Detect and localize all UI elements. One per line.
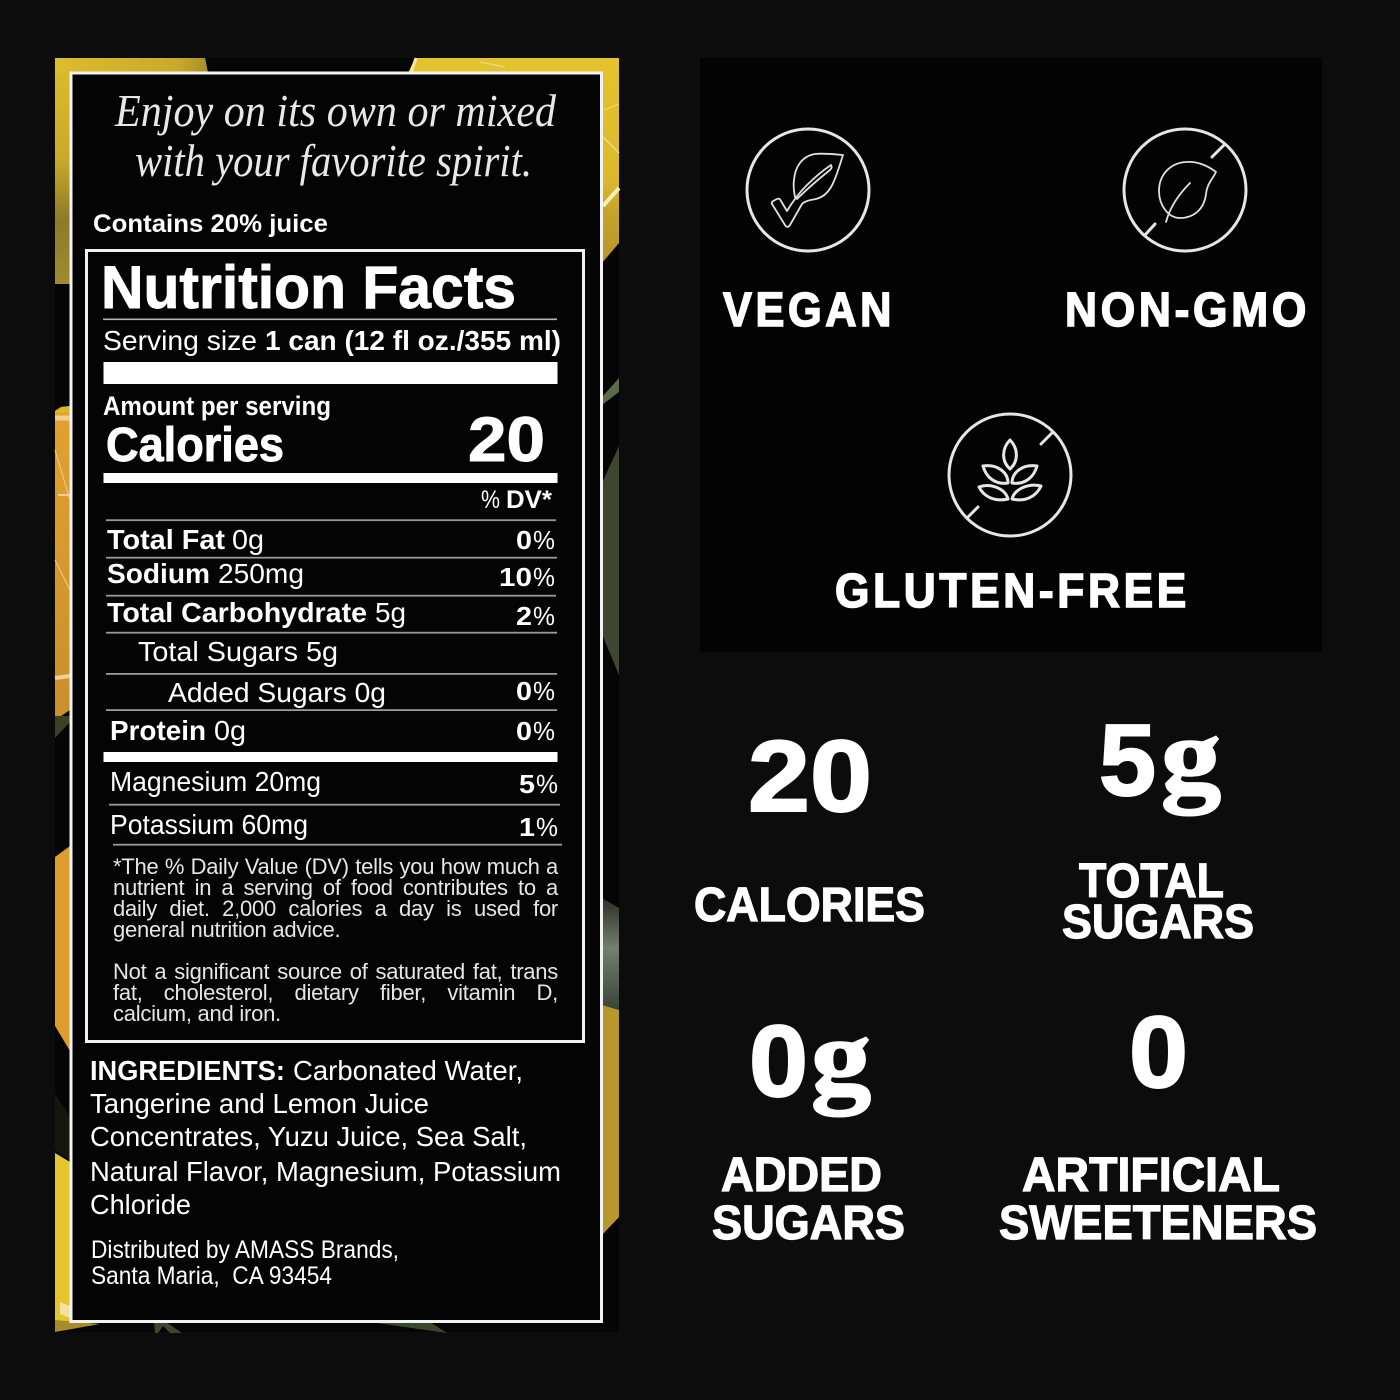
row: total carbohydrate: 2 — [516, 601, 532, 631]
panel: product label background — [55, 58, 619, 1333]
stat: 0g added sugars: ADDED — [721, 1149, 882, 1202]
label: non-gmo: NON-GMO — [1065, 284, 1310, 337]
citrus: right lower lemon — [602, 1005, 619, 1235]
row: added sugars: Added Sugars 0g — [168, 677, 386, 708]
stat: 5g total sugars: TOTAL — [1079, 855, 1224, 908]
row: magnesium: 5 — [519, 769, 535, 799]
panel: dietary badges — [700, 58, 1322, 652]
citrus: lemon pith streaks — [411, 58, 619, 206]
leaf: right gray leaf — [602, 898, 619, 1010]
ingredients: INGREDIENTS: — [90, 1055, 285, 1086]
amount per serving: Amount per serving — [103, 391, 331, 421]
ingredients: Tangerine and Lemon Juice — [90, 1088, 429, 1119]
row: protein: 0 — [516, 716, 532, 746]
panel: black label frame — [71, 73, 602, 1322]
stat: 0g added sugars: 0 — [749, 1006, 808, 1118]
leaf: right thin streak — [602, 378, 619, 405]
daily value header: % — [481, 486, 500, 514]
nutrient table — [104, 519, 562, 846]
row: sodium: 10 — [499, 562, 532, 592]
daily value footnote: general nutrition advice. — [113, 917, 340, 942]
stat: 5g total sugars: g — [1161, 698, 1221, 816]
citrus: top-left lemon — [55, 58, 208, 284]
stat: 0 artificial sweeteners — [999, 997, 1317, 1250]
citrus: left middle orange — [55, 846, 70, 1051]
leaf: lower-left dark — [55, 1094, 70, 1160]
stat: 0g added sugars — [712, 999, 905, 1250]
tagline — [114, 85, 557, 186]
serving size: Serving size — [103, 325, 257, 356]
row: added sugars: % — [533, 676, 555, 706]
ingredients: Carbonated Water, — [293, 1055, 523, 1086]
daily value header — [481, 486, 552, 514]
row: sodium — [107, 558, 555, 592]
stat: 0 artificial sweeteners: SWEETENERS — [999, 1197, 1317, 1250]
distributor — [91, 1236, 399, 1290]
stat: 20 calories: CALORIES — [694, 879, 925, 932]
row: potassium: 1 — [519, 812, 535, 842]
row: total fat — [107, 524, 555, 555]
row: total carbohydrate: % — [533, 601, 555, 631]
tagline: Enjoy on its own or mixed — [114, 85, 557, 136]
citrus: top-left lemon top band — [55, 58, 208, 73]
citrus: top-right lemon — [408, 58, 619, 263]
citrus: bottom-left gold corner — [55, 1320, 100, 1332]
row: protein: 0g — [214, 715, 246, 746]
row: potassium — [110, 809, 558, 842]
leaf: left dark green sliver — [55, 716, 70, 738]
distributor: Santa Maria, CA 93454 — [91, 1262, 332, 1290]
row: added sugars: 0 — [516, 676, 532, 706]
thick rule — [104, 473, 558, 483]
row: protein: % — [533, 716, 555, 746]
citrus: bottom-left lemon — [55, 1153, 70, 1322]
calories label: Calories — [106, 419, 284, 472]
not a significant source note: calcium, and iron. — [113, 1001, 281, 1026]
stat: 20 calories — [694, 721, 925, 932]
panel: nutrition facts box — [86, 250, 584, 1042]
row: total fat: Total Fat — [107, 524, 225, 555]
daily value footnote: daily diet. 2,000 calories a day is used for — [113, 896, 558, 921]
row: added sugars — [168, 676, 555, 708]
citrus: left orange slice — [55, 406, 70, 720]
ingredients: Chloride — [90, 1189, 191, 1220]
not a significant source note — [113, 961, 559, 1031]
tagline: with your favorite spirit. — [135, 135, 532, 186]
row: total sugars: Total Sugars 5g — [138, 636, 338, 667]
ingredients: Concentrates, Yuzu Juice, Sea Salt, — [90, 1121, 527, 1152]
row: total fat: 0g — [232, 524, 264, 555]
stat: 0 artificial sweeteners: 0 — [1129, 997, 1188, 1109]
row: potassium: Potassium 60mg — [110, 809, 308, 840]
stat: 5g total sugars: SUGARS — [1062, 896, 1254, 949]
not a significant source note: fat, cholesterol, dietary fiber, vitamin D, — [113, 980, 558, 1005]
stat: 0g added sugars: SUGARS — [712, 1197, 905, 1250]
icon: gluten-free — [949, 414, 1071, 536]
row: total carbohydrate — [107, 597, 555, 631]
row: total carbohydrate: 5g — [375, 597, 406, 628]
icon: vegan — [747, 129, 869, 251]
row: sodium: % — [533, 562, 555, 592]
ingredients: Natural Flavor, Magnesium, Potassium — [90, 1156, 561, 1187]
row: magnesium — [110, 766, 558, 799]
serving size: 1 can (12 fl oz./355 ml) — [265, 325, 561, 356]
serving size — [103, 325, 561, 356]
row: total fat: 0 — [516, 525, 532, 555]
leaf: bottom stems — [154, 1322, 447, 1333]
row: potassium: % — [536, 812, 558, 842]
label: gluten-free: GLUTEN-FREE — [835, 565, 1190, 618]
stat: 5g total sugars — [1062, 698, 1254, 949]
row: magnesium: Magnesium 20mg — [110, 766, 321, 797]
row: magnesium: % — [536, 769, 558, 799]
stat: 5g total sugars: 5 — [1099, 705, 1156, 817]
stat: 0 artificial sweeteners: ARTIFICIAL — [1022, 1149, 1280, 1202]
stat: 0g added sugars: g — [811, 999, 871, 1117]
stat: 20 calories: 20 — [748, 721, 872, 833]
daily value footnote: nutrient in a serving of food contributes to a — [113, 875, 558, 900]
daily value footnote — [113, 856, 559, 946]
ingredients — [90, 1055, 561, 1220]
row: sodium: 250mg — [218, 558, 304, 589]
row: protein — [110, 715, 555, 746]
leaf: right olive leaf — [602, 446, 619, 675]
distributor: Distributed by AMASS Brands, — [91, 1236, 399, 1264]
row: sodium: Sodium — [107, 558, 210, 589]
row: protein: Protein — [110, 715, 206, 746]
calories value: 20 — [468, 405, 545, 475]
daily value header: DV* — [506, 486, 552, 514]
citrus: orange rind — [55, 406, 70, 413]
row: total carbohydrate: Total Carbohydrate — [107, 597, 367, 628]
citrus: bottom-left pith — [60, 1302, 70, 1318]
heading: nutrition facts: Nutrition Facts — [101, 254, 516, 321]
citrus: orange pith — [55, 418, 70, 678]
row: total fat: % — [533, 525, 555, 555]
thick rule — [104, 362, 558, 384]
icon: non-gmo — [1124, 129, 1246, 251]
juice content note: Contains 20% juice — [93, 210, 328, 238]
label: vegan: VEGAN — [723, 284, 895, 337]
